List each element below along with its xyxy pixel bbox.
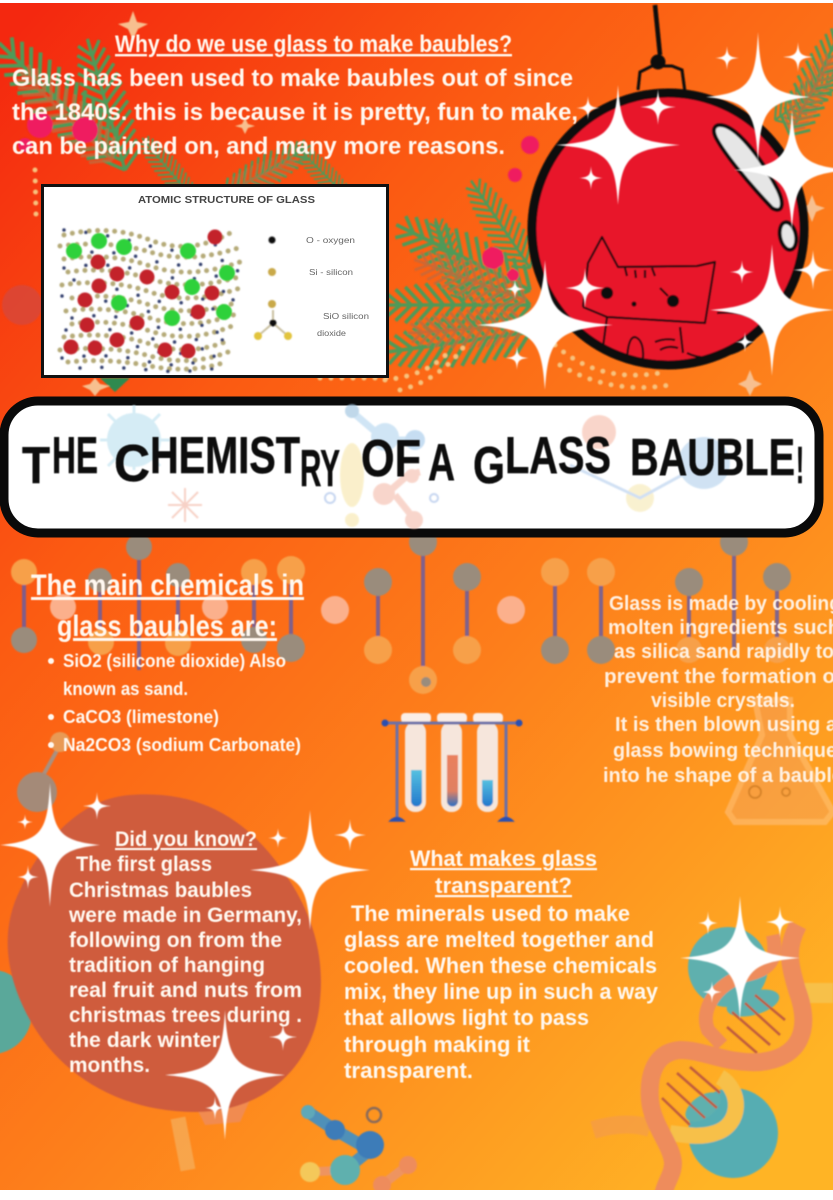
heading: did you know: Did you know?	[115, 828, 257, 851]
paragraph: transparent: that allows light to pass	[344, 1005, 589, 1030]
text: how glass is made: glass bowing technique	[613, 740, 833, 762]
paragraph: transparent: glass are melted together and	[344, 927, 654, 952]
title text: LASS	[505, 427, 611, 485]
title text: HE	[52, 427, 98, 485]
title text: G	[473, 437, 505, 495]
bauble highlight	[714, 125, 799, 251]
text: how glass is made	[603, 593, 833, 787]
paragraph: transparent: The minerals used to make	[351, 901, 630, 926]
heading: transparent: transparent?	[435, 873, 572, 898]
panel: did you know blob	[8, 794, 321, 1125]
text: did you know	[68, 828, 302, 1077]
paragraph: did you know: The first glass	[76, 853, 212, 876]
chemicals list: SiO2 (silicone dioxide) Also	[63, 651, 286, 671]
test tubes	[382, 713, 522, 821]
paragraph: did you know: real fruit and nuts from	[69, 979, 302, 1002]
atomic lattice	[60, 230, 292, 371]
paragraph: why glass: the 1840s. this is because it is pretty, fun to make,	[12, 99, 578, 126]
bauble hanger	[638, 5, 685, 92]
paragraph: why glass	[12, 65, 578, 160]
text: why do we use glass	[12, 31, 578, 160]
title text: RY	[300, 440, 340, 498]
icon: atomic structure diagram panel	[42, 186, 388, 376]
text: how glass is made: prevent the formation of	[604, 666, 833, 688]
heading: transparent	[410, 846, 597, 898]
paragraph: did you know: months.	[69, 1054, 150, 1077]
atomic diagram legend: O - oxygen	[306, 236, 355, 245]
atomic diagram legend: SiO silicon	[323, 312, 369, 321]
teal circle at left edge	[0, 970, 32, 1054]
paragraph: transparent: transparent.	[344, 1058, 473, 1083]
paragraph: did you know: christmas trees during .	[69, 1004, 302, 1027]
title text: A	[428, 434, 455, 492]
text: how glass is made: visible crystals.	[651, 690, 795, 712]
dumbbell molecules	[11, 528, 791, 812]
title banner: !	[796, 437, 804, 495]
paragraph: did you know: Christmas baubles	[69, 879, 252, 902]
atomic diagram legend	[306, 236, 369, 338]
heading: main chemicals: glass baubles are:	[57, 610, 277, 643]
title text: C	[114, 435, 150, 493]
paragraph: transparent: mix, they line up in such a way	[344, 979, 659, 1004]
icon: DNA helix with teal circles	[593, 925, 833, 1195]
atomic diagram title: ATOMIC STRUCTURE OF GLASS	[138, 195, 315, 206]
garland: pine branches and berries	[0, 11, 833, 396]
text: how glass is made: It is then blown using a	[615, 714, 833, 736]
paragraph: did you know: the dark winter	[69, 1029, 220, 1052]
text: main chemicals	[31, 569, 304, 755]
title text: T	[22, 437, 50, 495]
paragraph: why glass: Glass has been used to make baubles out of since	[12, 65, 573, 92]
faint molecule decorations in banner	[100, 404, 730, 529]
icon: red bauble with cat	[532, 5, 804, 365]
bottom page margin	[0, 1190, 833, 1200]
title text	[22, 427, 804, 498]
flask decoration	[728, 700, 833, 822]
heading: main chemicals	[31, 569, 304, 643]
text: how glass is made: as silica sand rapidly to	[614, 641, 833, 663]
paragraph: transparent: cooled. When these chemicals	[344, 953, 657, 978]
paragraph: why glass: can be painted on, and many more reasons.	[12, 133, 505, 160]
paragraph: did you know: tradition of hanging	[69, 954, 265, 977]
text: what makes glass transparent	[344, 846, 659, 1083]
paragraph: did you know: following on from the	[69, 929, 282, 952]
atomic diagram legend: Si - silicon	[309, 268, 353, 277]
chemicals list: Na2CO3 (sodium Carbonate)	[63, 735, 301, 755]
text: how glass is made: molten ingredients such	[608, 617, 833, 639]
chemicals list	[48, 651, 301, 755]
heading: why glass: Why do we use glass to make baubles?	[115, 31, 512, 58]
cat drawing	[583, 237, 762, 360]
title text: OF	[361, 430, 421, 488]
paragraph: did you know: were made in Germany,	[68, 904, 302, 927]
atomic diagram legend: dioxide	[317, 329, 347, 338]
title banner	[4, 401, 819, 533]
paragraph: did you know	[68, 853, 302, 1077]
paragraph: transparent: through making it	[344, 1032, 531, 1057]
bottom molecule	[178, 1105, 417, 1194]
heading: main chemicals: The main chemicals in	[31, 569, 304, 602]
title text: HEMIST	[150, 427, 300, 485]
chemicals list: CaCO3 (limestone)	[63, 707, 219, 727]
paragraph: transparent	[344, 901, 659, 1083]
heading: transparent: What makes glass	[410, 846, 597, 871]
chemicals list: known as sand.	[63, 679, 188, 699]
